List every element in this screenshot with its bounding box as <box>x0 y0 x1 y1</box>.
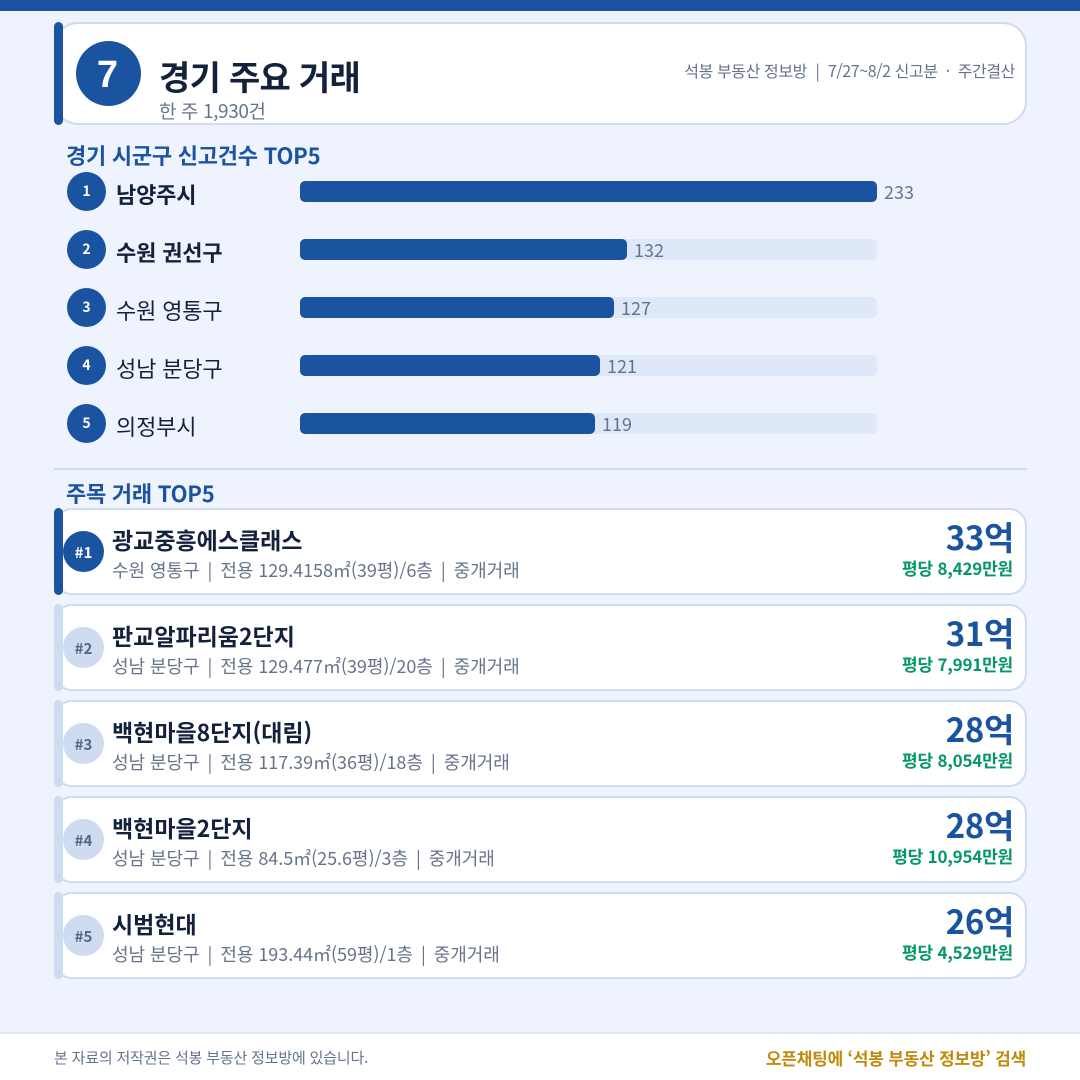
row 2: 수원 권선구 <box>116 236 222 268</box>
deal 3 price per pyeong: 평당 8,054만원 <box>902 747 1013 772</box>
copyright note: 본 자료의 저작권은 석봉 부동산 정보방에 있습니다. <box>54 1047 368 1068</box>
deal 5 details: 성남 분당구 | 전용 193.44㎡(59평)/1층 | 중개거래 <box>112 941 500 967</box>
source and period: 석봉 부동산 정보방 | 7/27~8/2 신고분 · 주간결산 <box>684 58 1015 82</box>
rank badge 4 <box>63 819 104 860</box>
deal 5 price: 26억 <box>946 896 1014 944</box>
deal 5 price per pyeong: 평당 4,529만원 <box>902 939 1013 964</box>
deal 2 price: 31억 <box>946 608 1014 656</box>
rank badge 5 <box>63 915 104 956</box>
open chat callout: 오픈채팅에 ‘석봉 부동산 정보방’ 검색 <box>766 1045 1026 1070</box>
row 3 <box>67 288 877 327</box>
row 1: 233 <box>884 179 914 205</box>
row 4: 성남 분당구 <box>116 352 222 384</box>
header accent bar <box>54 22 63 125</box>
subheading: 한 주 1,930건 <box>159 97 266 124</box>
panel: deal 4 <box>54 796 1027 883</box>
panel: deal 5 <box>54 892 1027 979</box>
row 1 <box>67 172 914 211</box>
row 5: 의정부시 <box>116 410 196 442</box>
deal 4 price per pyeong: 평당 10,954만원 <box>892 843 1013 868</box>
deal 1 price per pyeong: 평당 8,429만원 <box>902 555 1013 580</box>
heading: 경기 주요 거래 <box>159 51 360 100</box>
deal 2 name: 판교알파리움2단지 <box>112 618 295 652</box>
row 3: 수원 영통구 <box>116 294 222 326</box>
row 4 <box>67 346 877 385</box>
row 2 <box>67 230 877 269</box>
row 5 <box>67 404 877 443</box>
deal 2 price per pyeong: 평당 7,991만원 <box>902 651 1013 676</box>
deal 3 name: 백현마을8단지(대림) <box>112 714 312 748</box>
deal 4 name: 백현마을2단지 <box>112 810 253 844</box>
deal 5 name: 시범현대 <box>112 906 197 940</box>
row 3: 127 <box>621 295 651 321</box>
deal 3 details: 성남 분당구 | 전용 117.39㎡(36평)/18층 | 중개거래 <box>112 749 510 775</box>
rank badge 1: #1 <box>75 542 92 563</box>
row 5: 119 <box>602 411 632 437</box>
rank badge 4: #4 <box>75 830 92 851</box>
row 3: 3 <box>82 297 91 317</box>
deal 1 details: 수원 영통구 | 전용 129.4158㎡(39평)/6층 | 중개거래 <box>112 557 520 583</box>
footer <box>0 1032 1080 1080</box>
top bar <box>0 0 1080 11</box>
rank badge 2 <box>63 627 104 668</box>
deal 1 price: 33억 <box>946 512 1014 560</box>
deal 3 price: 28억 <box>946 704 1014 752</box>
rank badge 2: #2 <box>75 638 92 659</box>
deal 4 price: 28억 <box>946 800 1014 848</box>
panel: deal 3 <box>54 700 1027 787</box>
panel: header <box>54 22 1027 125</box>
panel: deal 1 <box>54 508 1027 595</box>
rank badge 3 <box>63 723 104 764</box>
header card background <box>54 22 1027 125</box>
row 4: 121 <box>607 353 637 379</box>
row 1: 1 <box>82 181 91 201</box>
heading: district ranking: 경기 시군구 신고건수 TOP5 <box>66 139 320 171</box>
row 1: 남양주시 <box>116 178 196 210</box>
row 5: 5 <box>82 413 91 433</box>
row 4: 4 <box>82 355 91 375</box>
number badge <box>76 41 141 106</box>
deal 4 details: 성남 분당구 | 전용 84.5㎡(25.6평)/3층 | 중개거래 <box>112 845 495 871</box>
rank badge 3: #3 <box>75 734 92 755</box>
bar chart: district report counts <box>67 172 914 443</box>
panel: deal 2 <box>54 604 1027 691</box>
row 2: 2 <box>82 239 91 259</box>
heading: notable deals: 주목 거래 TOP5 <box>66 477 214 509</box>
deal 2 details: 성남 분당구 | 전용 129.477㎡(39평)/20층 | 중개거래 <box>112 653 520 679</box>
rank badge 1 <box>63 531 104 572</box>
row 2: 132 <box>634 237 664 263</box>
number badge: 7 <box>97 54 118 96</box>
rank badge 5: #5 <box>75 926 92 947</box>
deal 1 name: 광교중흥에스클래스 <box>112 522 302 556</box>
